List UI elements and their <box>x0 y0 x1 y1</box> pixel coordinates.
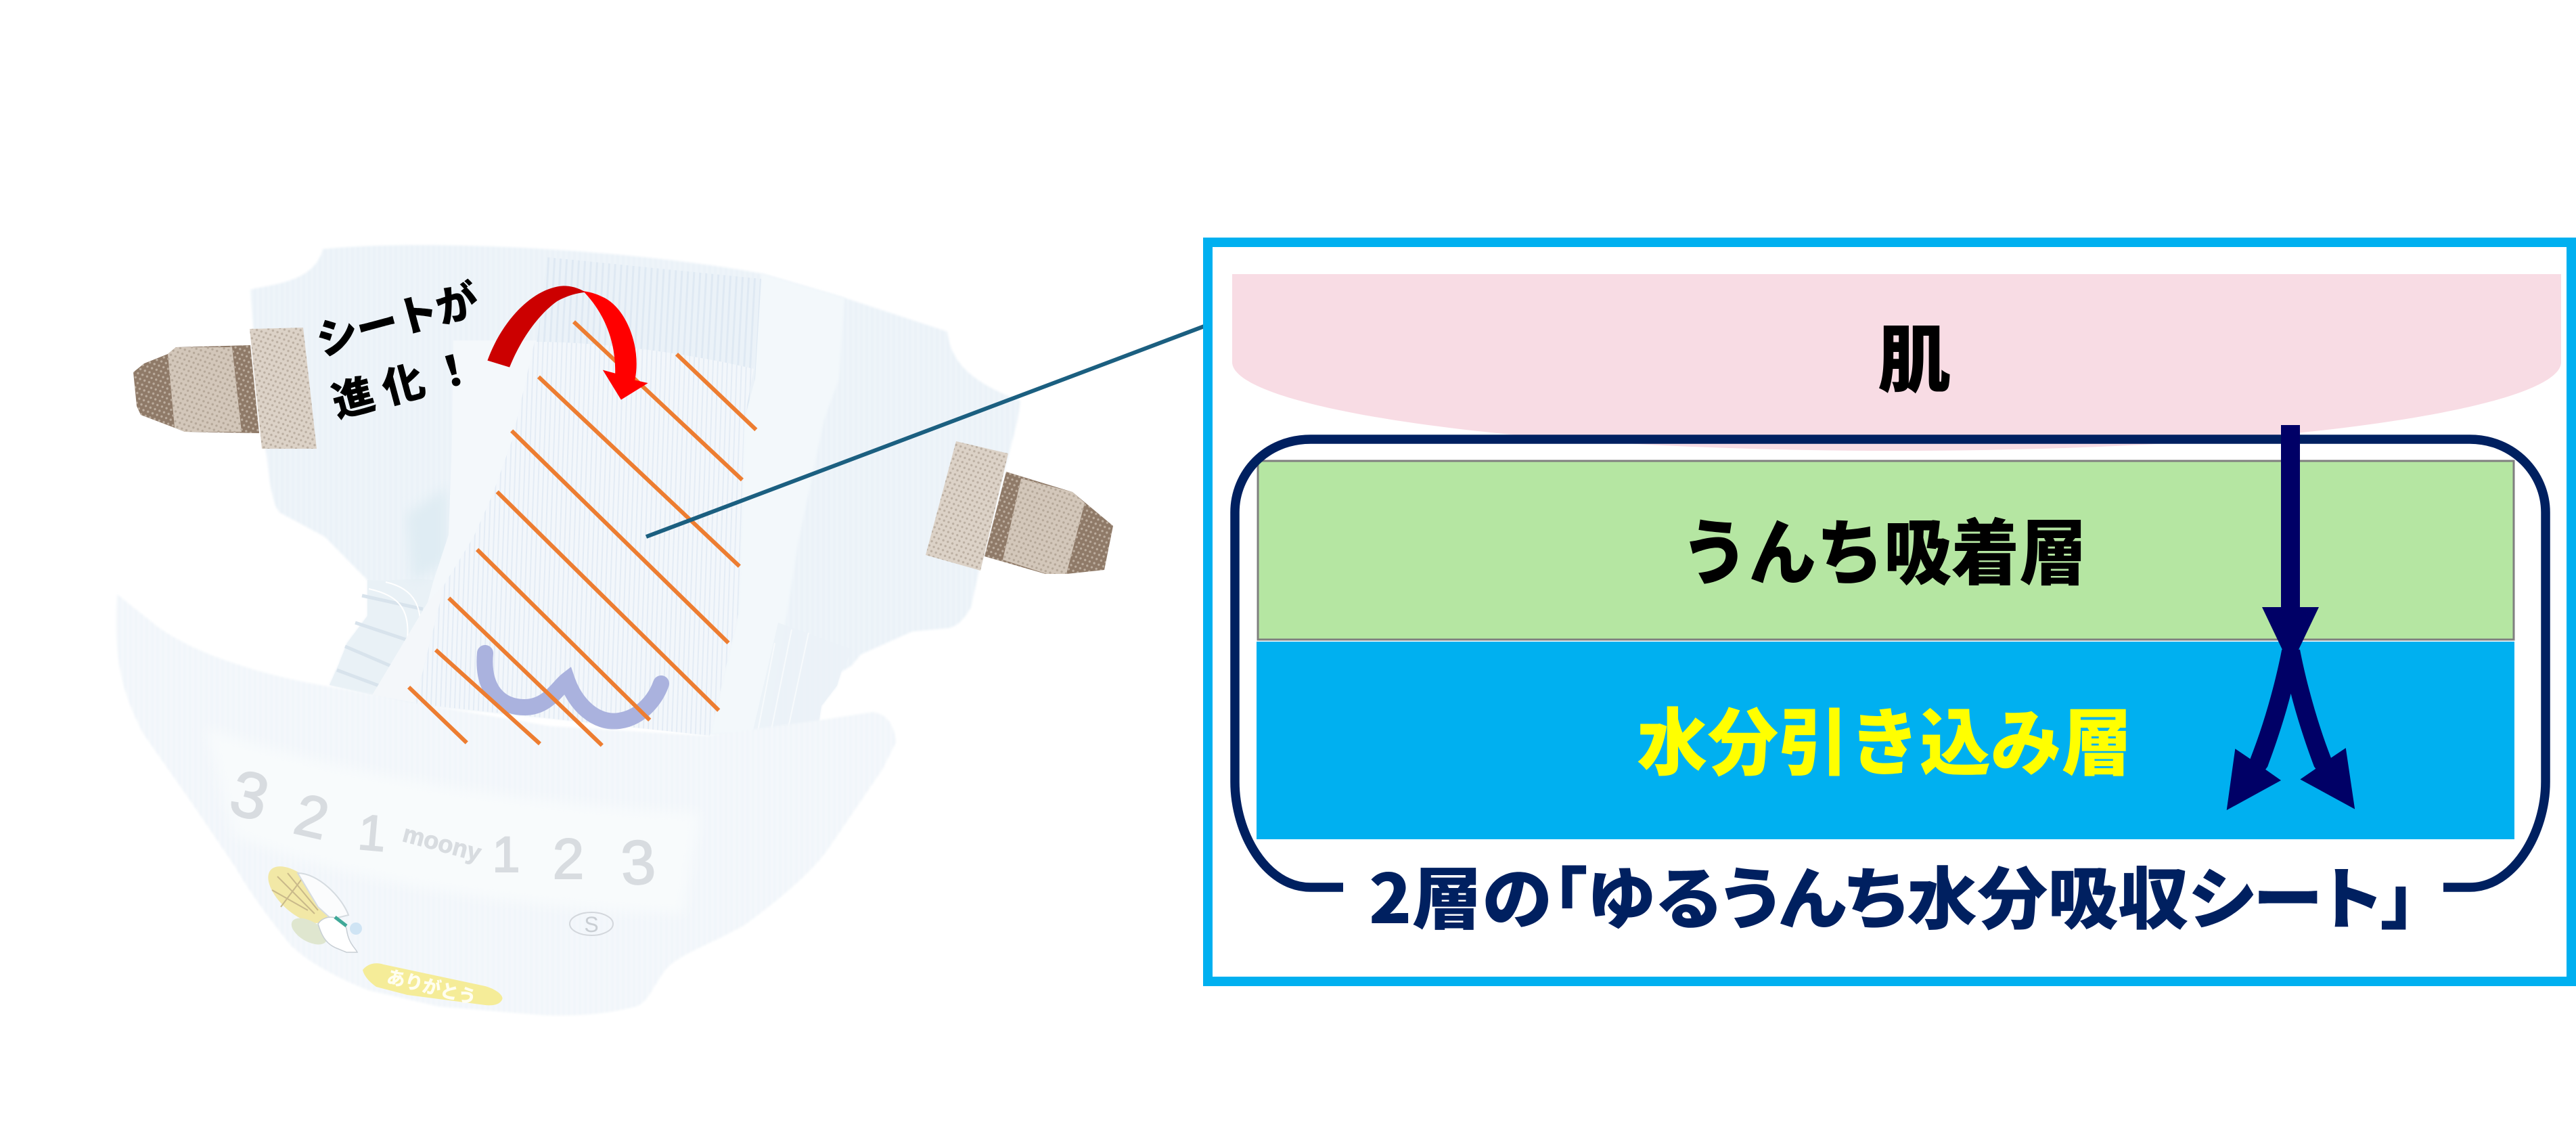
downward arrow <box>2262 425 2319 651</box>
skin layer <box>1232 274 2561 451</box>
size mark S <box>570 912 613 937</box>
label: シートが進化！: 進化！ <box>324 333 480 429</box>
soft shade <box>406 487 447 582</box>
diaper front waist panel <box>116 594 896 1015</box>
label: シートが進化！ <box>309 266 484 429</box>
orange hatching over sheet <box>409 321 756 745</box>
left flap <box>372 340 537 703</box>
top centre ribbed panel <box>537 257 761 420</box>
right gathers <box>752 623 853 733</box>
panel border <box>1208 242 2571 981</box>
sheet title: 2層の「ゆるうんち水分吸収シート」 <box>1369 845 2416 943</box>
panel: sheet cross-section <box>1208 242 2571 981</box>
absorbent sheet pad <box>415 342 754 736</box>
diaper back body <box>250 245 1020 738</box>
thank-you yellow label <box>363 962 503 1010</box>
right fastening tape <box>926 441 1113 574</box>
scale numbers and brand: 3 <box>223 756 276 835</box>
diaper illustration <box>116 245 1113 1015</box>
forked arrows <box>2227 650 2355 810</box>
curved red arrow <box>487 286 648 400</box>
left gathers <box>330 579 440 695</box>
poop absorbing layer <box>1258 461 2514 640</box>
right white band <box>710 273 844 734</box>
size mark S: S <box>584 912 599 937</box>
left fastening tape <box>133 328 317 449</box>
navy bracket around two layers <box>1235 439 2546 887</box>
scale numbers and brand: 1 <box>492 826 520 883</box>
skin layer: 肌 <box>1878 302 1951 407</box>
character and flower print <box>258 856 362 952</box>
scale numbers and brand: moony <box>400 819 484 867</box>
thank-you yellow label: ありがとう <box>384 962 480 1010</box>
scale numbers and brand: 1 <box>356 803 388 862</box>
scale numbers and brand: 2 <box>288 782 335 852</box>
scale numbers and brand: 2 <box>553 827 584 891</box>
scale numbers and brand: 3 <box>619 828 657 898</box>
water drawing layer <box>1257 642 2514 839</box>
poop absorbing layer: うんち吸着層 <box>1681 495 2087 600</box>
blue logo mark on sheet <box>484 653 661 721</box>
leader line to detail panel <box>646 325 1208 537</box>
scale numbers and brand <box>223 756 657 898</box>
label: シートが進化！: シートが <box>309 266 484 368</box>
water drawing layer: 水分引き込み層 <box>1637 685 2132 791</box>
